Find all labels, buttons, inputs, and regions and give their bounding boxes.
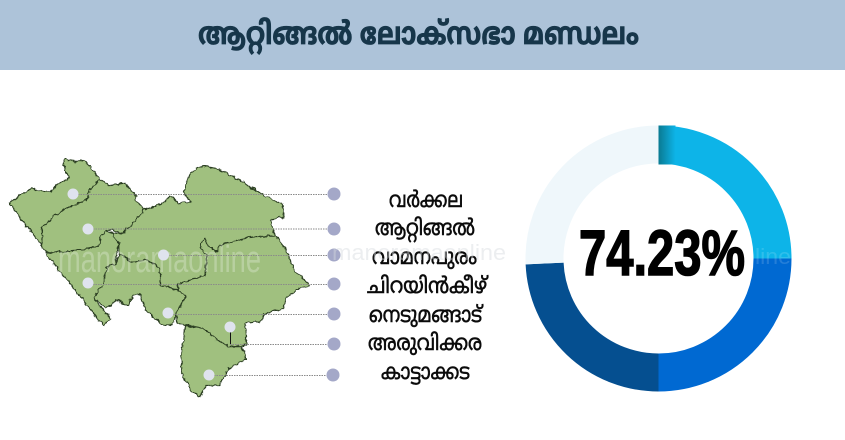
region: Varkala: [9, 158, 100, 245]
donut chart: [544, 126, 772, 372]
segment: blue: [658, 258, 772, 372]
segment: remainder: [544, 144, 658, 264]
legend labels: [367, 187, 489, 385]
label: Attingal: ആറ്റിങ്ങൽ: [375, 215, 475, 243]
label: Nedumangad: നെടുമങ്ങാട്: [369, 302, 484, 328]
region: Vamanapuram: [112, 166, 283, 290]
label: Kattakada: കാട്ടാക്കട: [381, 359, 470, 385]
watermark: manoramaonline: [58, 239, 261, 281]
label: Chirayinkeezhu: ചിറയിൻകീഴ്: [367, 273, 489, 298]
region: Attingal: [42, 180, 144, 252]
watermark: manoramaonline: [332, 240, 506, 265]
donut value: 74.23%: [579, 217, 745, 289]
map location dots: [68, 188, 236, 380]
segment: light blue: [658, 144, 772, 258]
segment gradient edge: [658, 126, 676, 164]
label: Aruvikkara: അരുവിക്കര: [368, 330, 482, 356]
region: Kattakada: [182, 326, 246, 397]
donut watermark: line: [755, 244, 791, 269]
leader lines: [73, 194, 334, 376]
map pointer stem: [230, 327, 232, 344]
region: Chirayinkeezhu: [45, 231, 119, 326]
legend dots: [326, 188, 340, 382]
segment: dark blue: [545, 264, 658, 372]
region: Nedumangad: [176, 236, 310, 347]
map of constituency segments: [9, 158, 310, 397]
label: Varkala: വർക്കല: [389, 187, 463, 212]
region: Aruvikkara: [93, 255, 186, 325]
title: ആറ്റിങ്ങൽ ലോക്സഭാ മണ്ഡലം: [198, 16, 639, 55]
header banner: [0, 0, 845, 70]
label: Vamanapuram: വാമനപുരം: [372, 244, 477, 270]
